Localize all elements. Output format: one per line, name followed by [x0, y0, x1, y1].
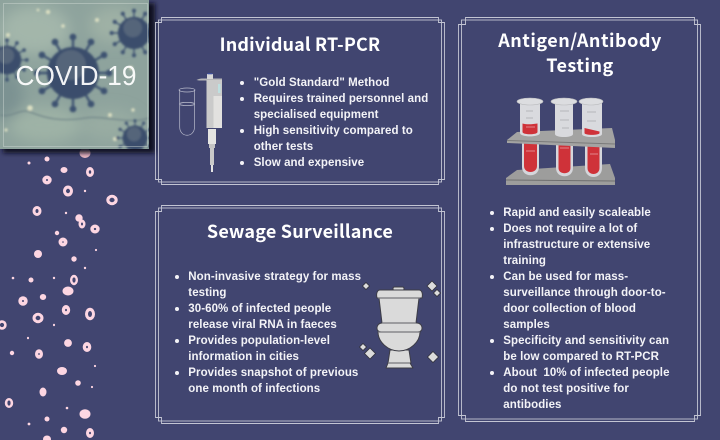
text block: RT-PCR bullets: other tests	[254, 141, 313, 153]
text block: RT-PCR bullets: specialised equipment	[254, 109, 379, 121]
text block: antigen bullets: do not test positive for	[503, 383, 629, 395]
text block: antigen bullets: be low compared to RT-PCR	[503, 351, 659, 363]
text block: RT-PCR bullets: Requires trained personnel and	[254, 93, 428, 105]
text block: RT-PCR bullets	[240, 77, 428, 169]
text block: antigen bullets: antibodies	[503, 399, 562, 411]
text block: antigen bullets: samples	[503, 319, 550, 331]
text block: antigen bullets: training	[503, 255, 546, 267]
text block: antigen bullets: infrastructure or extensive	[503, 239, 650, 251]
text block: sewage bullets: Provides population-level	[188, 335, 330, 347]
text block: antigen bullets: surveillance through door-to-	[503, 287, 666, 299]
text block: antigen bullets: Rapid and easily scaleable	[503, 207, 651, 219]
panel: Individual RT-PCR	[155, 17, 445, 185]
text block: sewage bullets: Non-invasive strategy for mass	[188, 271, 361, 283]
text block: antigen bullets: Does not require a lot of	[503, 223, 637, 235]
icon: clean toilet with sparkles	[359, 280, 441, 368]
text block: antigen bullets: Specificity and sensitivity can	[503, 335, 669, 347]
photo: COVID-19 virus image	[0, 0, 158, 157]
panel: Antigen/Antibody Testing	[458, 17, 701, 422]
text block: sewage bullets: one month of infections	[188, 383, 320, 395]
heading: Antigen/Antibody Testing: Antigen/Antibody	[498, 27, 662, 53]
heading: Individual RT-PCR: Individual RT-PCR	[220, 31, 380, 57]
text block: RT-PCR bullets: Slow and expensive	[254, 157, 364, 169]
text block: antigen bullets: Can be used for mass-	[503, 271, 628, 283]
icon: test tube and pipette	[178, 73, 222, 172]
panel: Sewage Surveillance	[155, 205, 445, 424]
icon: blood tubes in rack	[506, 98, 615, 185]
COVID-19 title on photo: COVID-19	[16, 60, 136, 91]
text block: antigen bullets	[490, 207, 670, 411]
text block: antigen bullets: door collection of blood	[503, 303, 636, 315]
heading: Antigen/Antibody Testing	[498, 27, 662, 78]
text block: sewage bullets: testing	[188, 287, 226, 299]
text block: sewage bullets: information in cities	[188, 351, 299, 363]
text block: RT-PCR bullets: High sensitivity compared to	[254, 125, 413, 137]
text block: sewage bullets: 30-60% of infected people	[188, 303, 331, 315]
text block: sewage bullets	[175, 271, 361, 395]
text block: sewage bullets: Provides snapshot of previous	[188, 367, 358, 379]
heading: Sewage Surveillance: Sewage Surveillance	[207, 218, 393, 244]
heading: Antigen/Antibody Testing: Testing	[546, 52, 614, 78]
text block: sewage bullets: release viral RNA in faeces	[188, 319, 337, 331]
text block: antigen bullets: About 10% of infected people	[503, 367, 670, 379]
scattered pink dots	[0, 149, 118, 440]
text block: RT-PCR bullets: "Gold Standard" Method	[254, 77, 389, 89]
